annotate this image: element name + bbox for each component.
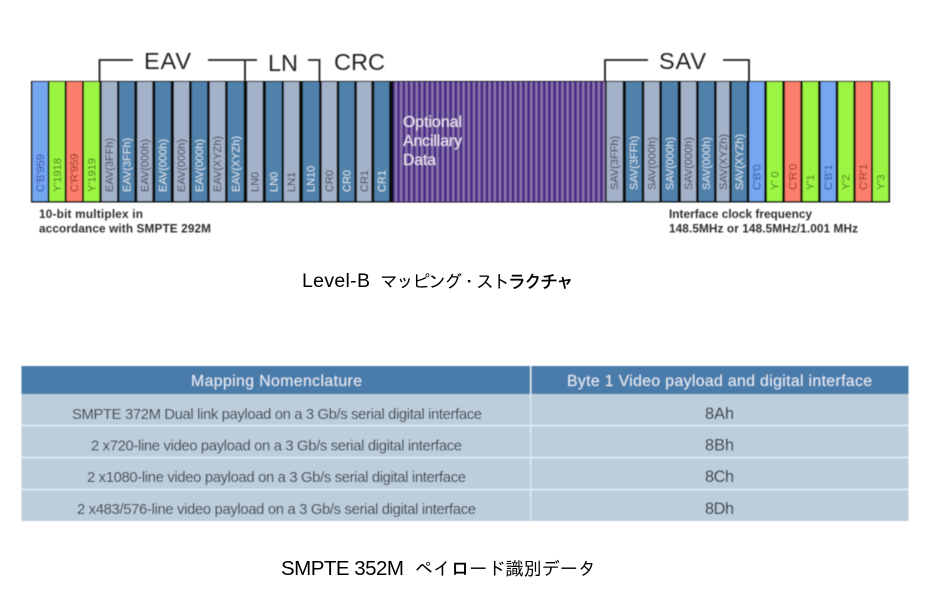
trailing chroma and luma cells: C'R'0 bbox=[788, 164, 800, 190]
row 1 bbox=[72, 405, 734, 423]
row 2: 2 x720-line video payload on a 3 Gb/s serial digital interface bbox=[91, 438, 462, 454]
note: clock frequency bbox=[669, 207, 858, 236]
bracket: SAV: SAV bbox=[659, 48, 706, 74]
caption: SMPTE 352M payload identification data: ペイロード識別データ bbox=[415, 559, 596, 578]
row 2 bbox=[91, 436, 734, 454]
row 4: 2 x483/576-line video payload on a 3 Gb/s serial digital interface bbox=[77, 502, 476, 518]
caption: SMPTE 352M payload identification data: SMPTE 352M bbox=[281, 557, 404, 580]
note: clock frequency: 148.5MHz or 148.5MHz/1.001 MHz bbox=[669, 222, 858, 236]
caption: SMPTE 352M payload identification data bbox=[281, 557, 596, 580]
note: multiplex: accordance with SMPTE 292M bbox=[39, 222, 211, 236]
leading chroma and luma cells bbox=[32, 82, 99, 201]
purple ancillary data block: Ancillary bbox=[403, 133, 462, 150]
row 2: 8Bh bbox=[705, 436, 734, 454]
diagram: Level-B mapping structure bbox=[31, 48, 890, 236]
table header: Byte 1 Video payload and digital interface bbox=[567, 373, 872, 390]
strip frame bbox=[31, 81, 890, 202]
row 3 bbox=[87, 468, 734, 486]
bracket: SAV bbox=[605, 48, 749, 81]
EAV cells: EAV(XYZh) bbox=[212, 136, 224, 192]
label: CRC: CRC bbox=[334, 49, 385, 75]
bracket: LN bbox=[268, 50, 320, 81]
leading chroma and luma cells: C'R'959 bbox=[69, 154, 81, 192]
row 4: 8Dh bbox=[705, 500, 734, 518]
SAV cells: SAV(000h) bbox=[664, 137, 676, 190]
row 1: 8Ah bbox=[705, 405, 734, 423]
SAV cells bbox=[607, 82, 747, 201]
table: SMPTE 352M payload identification bbox=[22, 366, 908, 521]
bracket: LN: LN bbox=[268, 50, 298, 76]
CRC cells: CR1 bbox=[359, 170, 371, 192]
LN cells: LN1 bbox=[286, 172, 298, 192]
purple ancillary data block: Optional bbox=[403, 114, 462, 131]
LN cells: LN10 bbox=[306, 166, 318, 192]
EAV cells: EAV(XYZh) bbox=[230, 136, 242, 192]
trailing chroma and luma cells: Y'3 bbox=[876, 174, 888, 190]
CRC cells bbox=[322, 82, 389, 201]
EAV cells: EAV(000h) bbox=[176, 139, 188, 192]
trailing chroma and luma cells: Y'1 bbox=[805, 174, 817, 190]
CRC cells: CR0 bbox=[324, 170, 336, 192]
LN cells: LN0 bbox=[250, 172, 262, 192]
EAV cells bbox=[102, 82, 244, 201]
table body bbox=[22, 394, 908, 521]
EAV cells: EAV(000h) bbox=[194, 139, 206, 192]
LN cells: LN0 bbox=[268, 172, 280, 192]
leading chroma and luma cells: Y'1919 bbox=[86, 158, 98, 192]
trailing chroma and luma cells: Y'2 bbox=[840, 174, 852, 190]
SAV cells: SAV(3FFh) bbox=[628, 136, 640, 190]
purple ancillary data block: Data bbox=[403, 152, 436, 169]
EAV cells: EAV(000h) bbox=[158, 139, 170, 192]
EAV cells: EAV(000h) bbox=[140, 139, 152, 192]
EAV cells: EAV(3FFh) bbox=[104, 138, 116, 192]
bracket: EAV: EAV bbox=[144, 48, 191, 74]
trailing chroma and luma cells: Y' 0 bbox=[770, 171, 782, 190]
row 4 bbox=[77, 500, 734, 518]
trailing chroma and luma cells: C'R'1 bbox=[858, 164, 870, 190]
caption: Level-B mapping structure bbox=[302, 270, 574, 292]
trailing chroma and luma cells: C'B'1 bbox=[823, 164, 835, 190]
bracket: EAV bbox=[100, 48, 257, 81]
leading chroma and luma cells: Y'1918 bbox=[52, 158, 64, 192]
note: clock frequency: Interface clock frequency bbox=[669, 207, 812, 221]
leading chroma and luma cells: C'B'959 bbox=[35, 154, 47, 192]
CRC cells: CR1 bbox=[376, 170, 388, 192]
caption: Level-B mapping structure: マッピング・ストラクチャ bbox=[380, 272, 574, 291]
table header: Mapping Nomenclature bbox=[191, 373, 362, 390]
CRC cells: CR0 bbox=[342, 170, 354, 192]
SAV cells: SAV(000h) bbox=[683, 137, 695, 190]
table header bbox=[22, 366, 908, 394]
row 3: 8Ch bbox=[705, 468, 734, 486]
EAV cells: EAV(3FFh) bbox=[122, 138, 134, 192]
row 3: 2 x1080-line video payload on a 3 Gb/s serial digital interface bbox=[87, 470, 466, 486]
SAV cells: SAV(3FFh) bbox=[609, 136, 621, 190]
SAV cells: SAV(XYZh) bbox=[734, 134, 746, 190]
trailing chroma and luma cells: C'B'0 bbox=[752, 164, 764, 190]
SAV cells: SAV(XYZh) bbox=[718, 134, 730, 190]
row 1: SMPTE 372M Dual link payload on a 3 Gb/s serial digital interface bbox=[72, 407, 482, 423]
caption: Level-B mapping structure: Level-B bbox=[302, 270, 370, 292]
LN cells bbox=[247, 82, 319, 201]
note: multiplex bbox=[39, 207, 211, 236]
SAV cells: SAV(000h) bbox=[701, 137, 713, 190]
note: multiplex: 10-bit multiplex in bbox=[39, 207, 143, 221]
SAV cells: SAV(000h) bbox=[646, 137, 658, 190]
trailing chroma and luma cells bbox=[749, 82, 888, 201]
purple ancillary data block bbox=[393, 82, 605, 202]
